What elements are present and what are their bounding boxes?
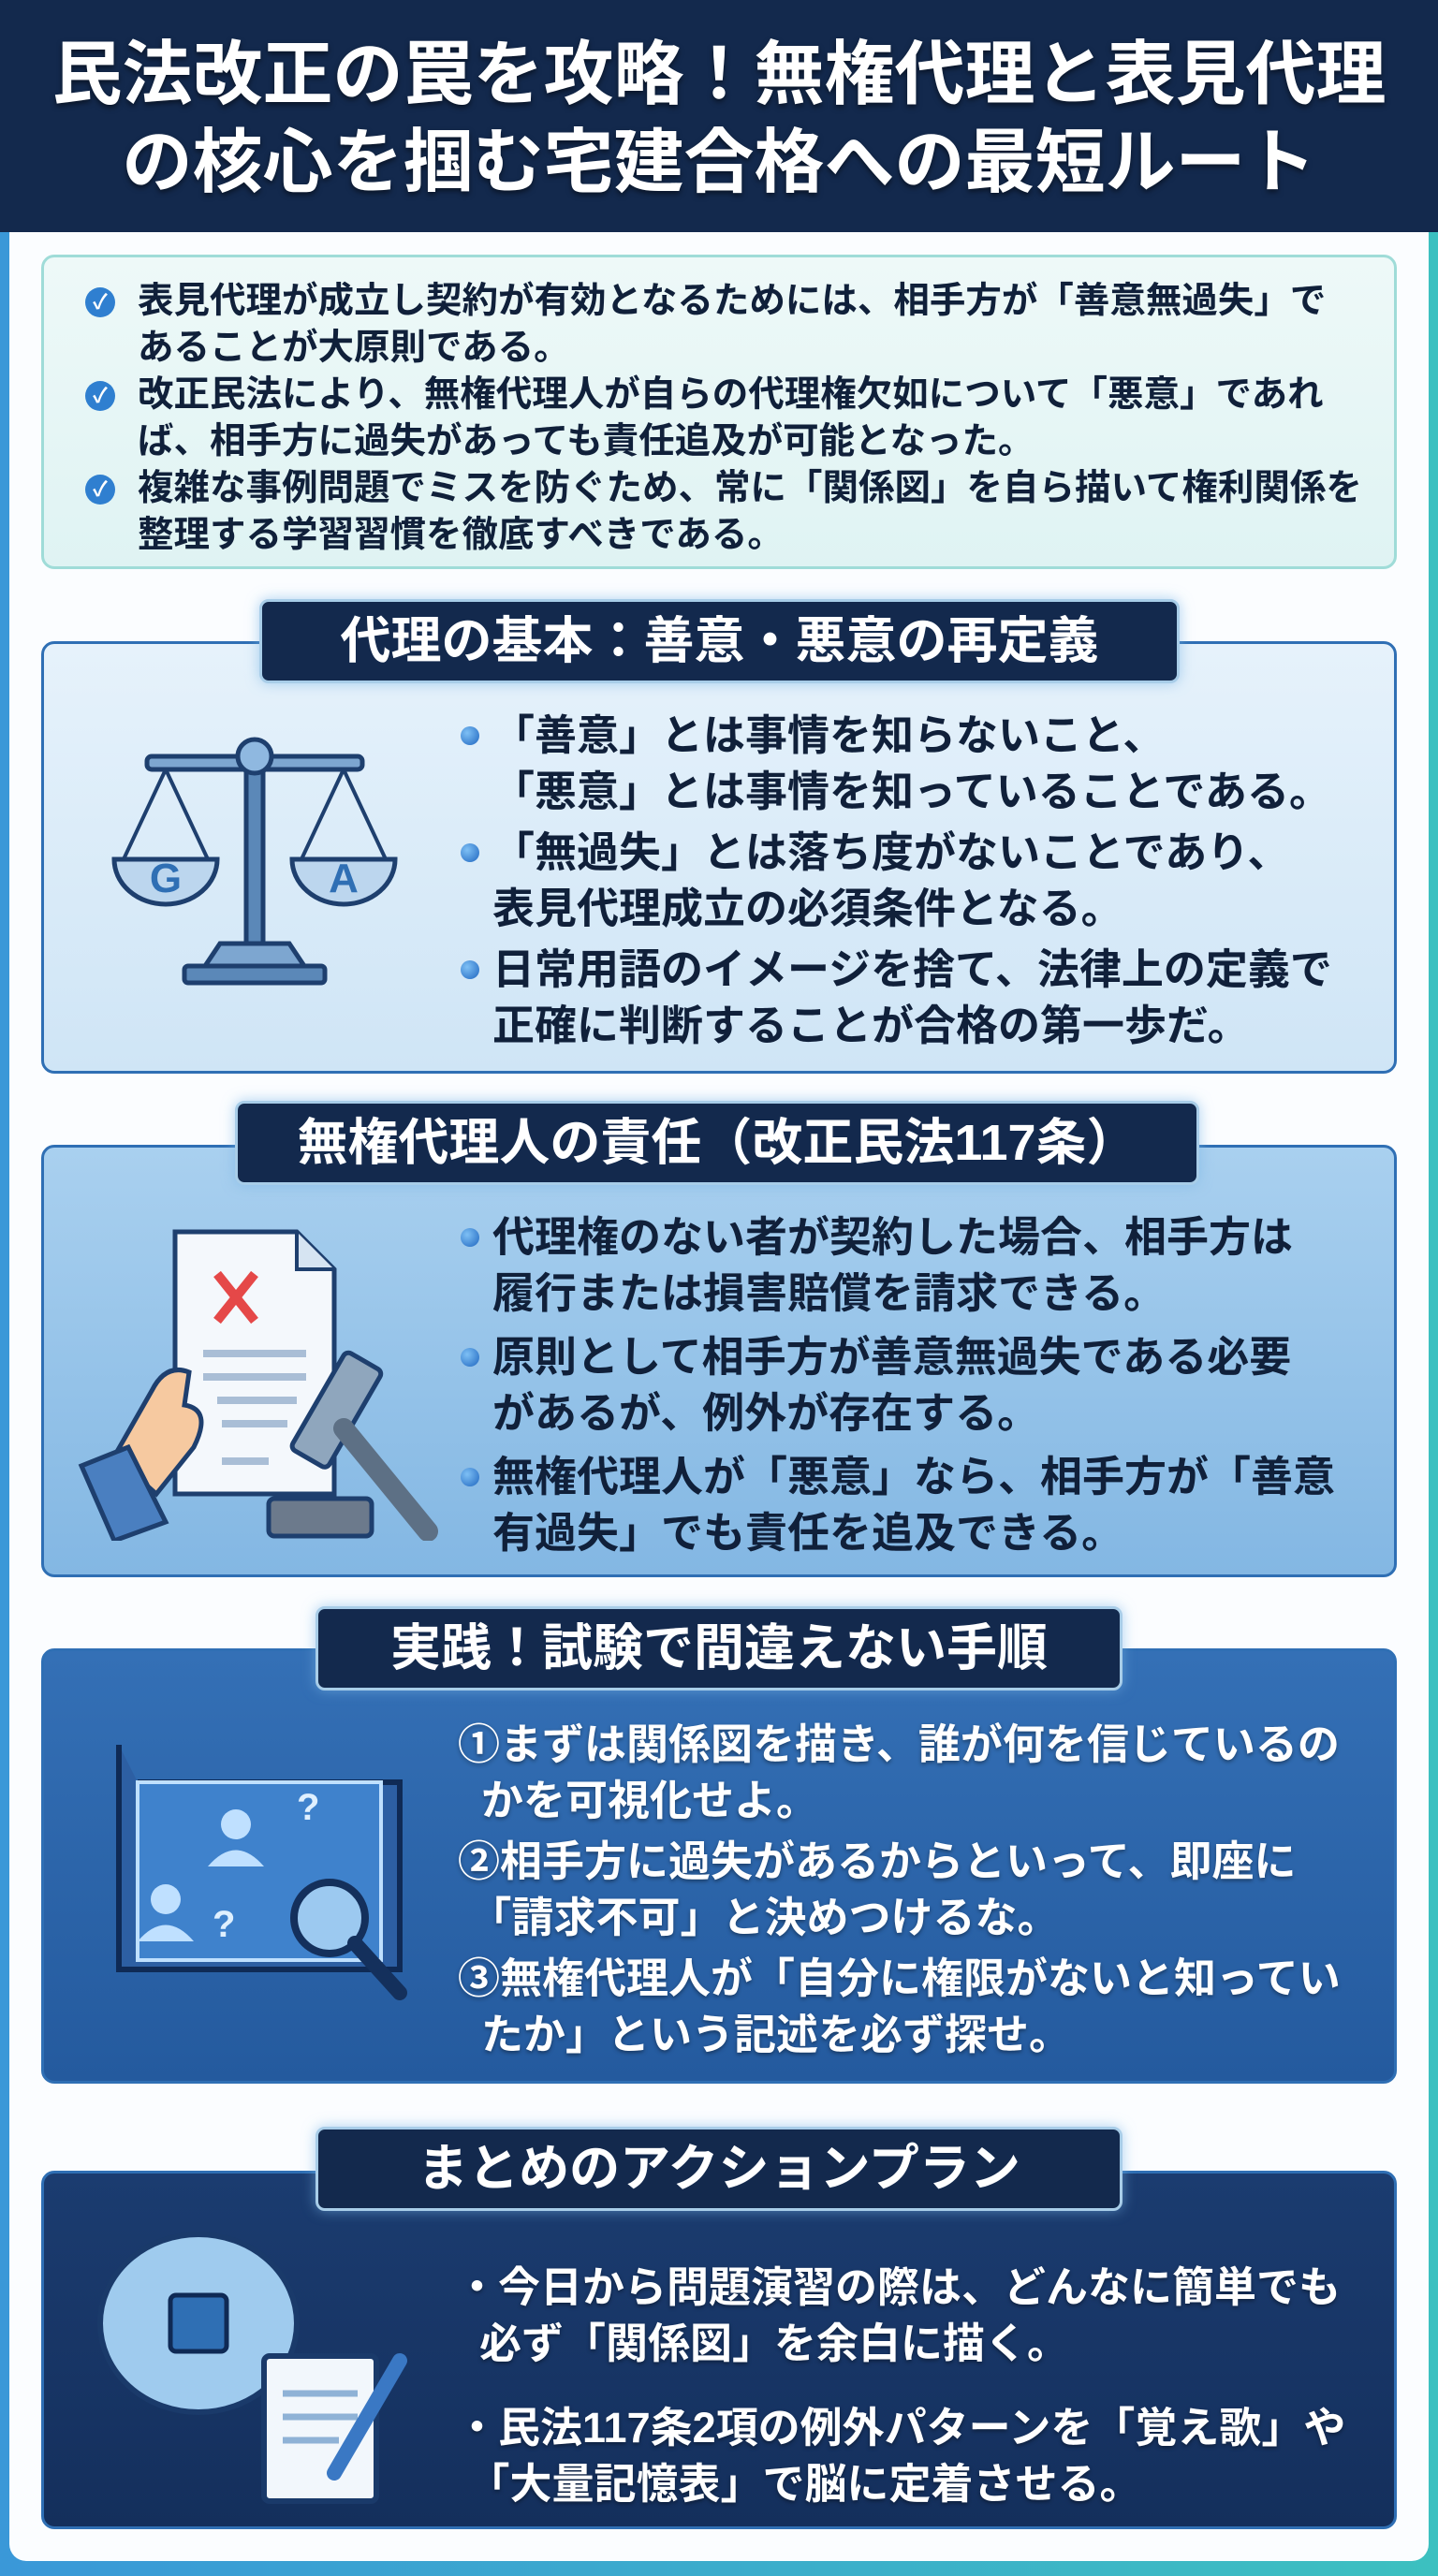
text: liability bullets: があるが、例外が存在する。 — [492, 1389, 1039, 1437]
text: practice steps: ③無権代理人が「自分に権限がないと知ってい — [458, 1954, 1341, 2002]
text: basics bullets: 日常用語のイメージを捨て、法律上の定義で — [492, 945, 1332, 993]
text: liability bullets: 代理権のない者が契約した場合、相手方は — [492, 1213, 1293, 1261]
text: practice steps: たか」という記述を必ず探せ。 — [481, 2011, 1071, 2058]
icon: relationship map: ? — [213, 1904, 235, 1945]
title — [0, 0, 1438, 232]
icon: brain and notepad — [103, 2237, 407, 2504]
heading: basics: 代理の基本：善意・悪意の再定義 — [341, 613, 1099, 669]
text: basics bullets: 表見代理成立の必須条件となる。 — [492, 885, 1123, 932]
text: action items: ・今日から問題演習の際は、どんなに簡単でも — [456, 2263, 1341, 2311]
text: liability bullets: 原則として相手方が善意無過失である必要 — [492, 1333, 1291, 1381]
panel: action plan — [41, 2171, 1397, 2529]
summary item 2 — [85, 374, 1324, 461]
panel: liability — [41, 1145, 1397, 1577]
text: action items: 必ず「関係図」を余白に描く。 — [479, 2320, 1069, 2367]
heading: action plan — [315, 2127, 1123, 2211]
text: action items: ・民法117条2項の例外パターンを「覚え歌」や — [456, 2404, 1345, 2452]
icon: scale: A — [329, 856, 359, 901]
panel: basics — [41, 641, 1397, 1074]
title: 民法改正の罠を攻略！無権代理と表見代理 — [51, 35, 1386, 113]
heading: action plan: まとめのアクションプラン — [418, 2141, 1020, 2197]
summary item 3: 複雑な事例問題でミスを防ぐため、常に「関係図」を自ら描いて権利関係を — [138, 468, 1362, 508]
icon: document and gavel — [79, 1230, 438, 1541]
panel: practice — [41, 1648, 1397, 2084]
text: action items: 「大量記憶表」で脳に定着させる。 — [468, 2460, 1142, 2508]
text: action items — [456, 2263, 1345, 2508]
icon: scale: G — [150, 856, 182, 901]
heading: liability: 無権代理人の責任（改正民法117条） — [297, 1115, 1137, 1171]
text: practice steps: ②相手方に過失があるからといって、即座に — [458, 1837, 1297, 1885]
text: basics bullets: 「無過失」とは落ち度がないことであり、 — [492, 828, 1289, 876]
text: basics bullets: 正確に判断することが合格の第一歩だ。 — [492, 1002, 1250, 1049]
summary item 2: 改正民法により、無権代理人が自らの代理権欠如について「悪意」であれ — [138, 374, 1324, 415]
text: practice steps: 「請求不可」と決めつけるな。 — [470, 1894, 1060, 1941]
heading: practice — [315, 1606, 1123, 1690]
text: practice steps: ①まずは関係図を描き、誰が何を信じているの — [458, 1720, 1340, 1768]
text: liability bullets — [461, 1213, 1335, 1557]
summary box: ✓ — [93, 290, 108, 314]
text: practice steps: かを可視化せよ。 — [481, 1777, 818, 1824]
summary item 1: 表見代理が成立し契約が有効となるためには、相手方が「善意無過失」で — [138, 281, 1326, 321]
summary box: ✓ — [93, 384, 108, 407]
icon: relationship map — [116, 1745, 407, 2000]
summary item 1: あることが大原則である。 — [138, 328, 570, 368]
text: basics bullets — [461, 711, 1332, 1049]
heading: practice: 実践！試験で間違えない手順 — [390, 1620, 1048, 1676]
summary item 2: ば、相手方に過失があっても責任追及が可能となった。 — [138, 421, 1034, 461]
summary item 3: 整理する学習習慣を徹底すべきである。 — [138, 515, 784, 555]
summary box — [41, 255, 1397, 569]
text: liability bullets: 有過失」でも責任を追及できる。 — [492, 1509, 1123, 1557]
text: liability bullets: 履行または損害賠償を請求できる。 — [492, 1269, 1166, 1317]
heading: liability — [235, 1101, 1199, 1185]
text: basics bullets: 「悪意」とは事情を知っていることである。 — [492, 768, 1331, 815]
summary item 1 — [85, 281, 1326, 368]
icon: relationship map: ? — [297, 1787, 319, 1828]
text: liability bullets: 無権代理人が「悪意」なら、相手方が「善意 — [492, 1453, 1335, 1500]
heading: basics — [259, 599, 1180, 683]
text: practice steps — [457, 1720, 1341, 2058]
summary item 3 — [85, 468, 1362, 555]
icon: scale — [112, 738, 397, 985]
text: basics bullets: 「善意」とは事情を知らないこと、 — [492, 711, 1165, 759]
title: の核心を掴む宅建合格への最短ルート — [122, 123, 1316, 201]
summary box: ✓ — [93, 477, 108, 501]
